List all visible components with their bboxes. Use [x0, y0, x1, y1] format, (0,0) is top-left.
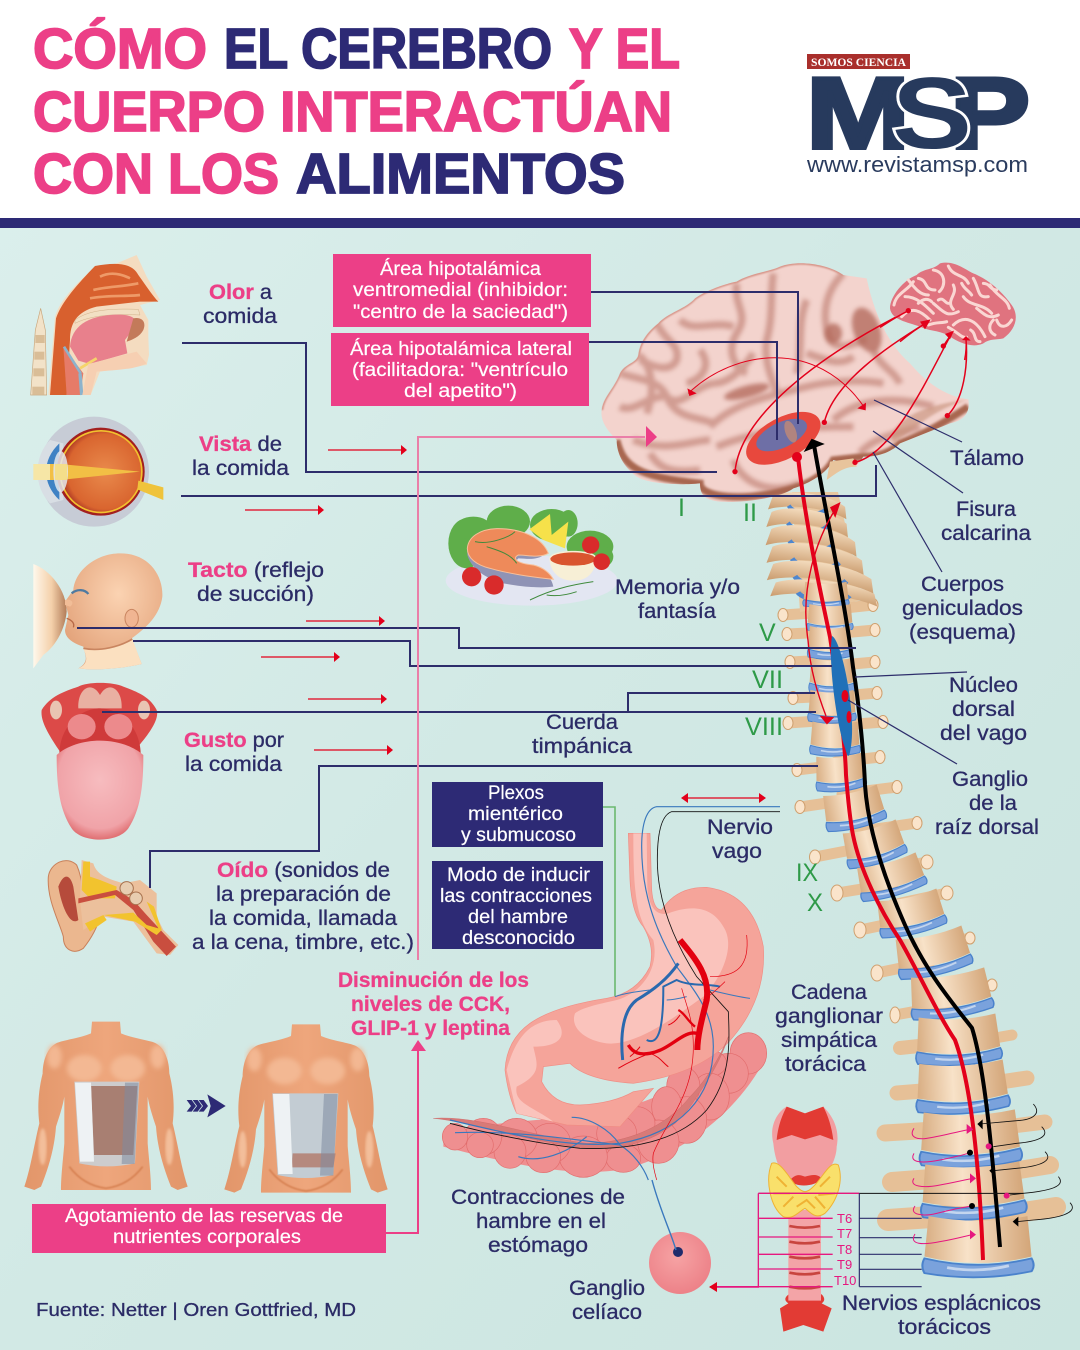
panel: ventromedial hypothalamic area [333, 254, 591, 327]
header divider bar [0, 218, 1080, 228]
icon: infant breastfeeding [33, 553, 162, 669]
text: dorsal vagal nucleus: del vago [940, 722, 1027, 745]
icon: food plate [446, 506, 618, 606]
cervical column [792, 492, 862, 612]
text: celiac ganglion [569, 1277, 645, 1324]
title: Y EL [569, 17, 680, 81]
text: splanchnic nerves: torácicos [898, 1316, 991, 1339]
text: hormone levels: GLIP-1 y leptina [351, 1017, 510, 1040]
panel: hunger contractions [432, 861, 603, 949]
text: dorsal vagal nucleus: dorsal [952, 698, 1015, 721]
panel: nutrient depletion [32, 1204, 386, 1253]
text: dorsal vagal nucleus: Núcleo [949, 674, 1018, 697]
text: splanchnic nerves [842, 1292, 1041, 1339]
title: CÓMO [33, 17, 207, 81]
text: hormone levels [338, 969, 529, 1040]
vertebral bodies and discs [803, 582, 849, 608]
panel: lateral hypothalamic area: (facilitadora: "ventrículo [352, 360, 568, 381]
illustration: thyroid and trachea [769, 1107, 840, 1332]
logo: MSP: P [950, 58, 1030, 170]
vagal nucleus [831, 636, 852, 756]
text: geniculate bodies: Cuerpos [921, 573, 1004, 596]
panel: hunger contractions: del hambre [468, 907, 568, 928]
text: memory: fantasía [638, 600, 716, 623]
text: spinal levels: T6 [837, 1211, 852, 1226]
text: hunger contractions: hambre en el [476, 1210, 606, 1233]
text: hormone levels: Disminución de los [338, 969, 529, 992]
text: spinal levels: T7 [837, 1226, 852, 1241]
text: hunger contractions: estómago [488, 1234, 588, 1257]
text: hormone levels: niveles de CCK, [351, 993, 510, 1016]
panel: ventromedial hypothalamic area: ventromedial (inhibidor: [353, 280, 568, 301]
title: EL CEREBRO [224, 17, 552, 81]
text: vagus nerve [707, 816, 773, 863]
text: vista: la comida [192, 457, 289, 480]
text: oído: Oído (sonidos de [217, 859, 390, 882]
arteries [618, 935, 747, 1180]
right transverse processes [826, 605, 1056, 1220]
icon: ear section [48, 860, 178, 956]
text: dorsal root ganglion: Ganglio [952, 768, 1028, 791]
process ends [778, 598, 997, 1023]
text: spinal levels: T9 [837, 1257, 852, 1272]
tracts [688, 311, 967, 472]
text: sympathetic chain: Cadena [791, 981, 867, 1004]
illustration: large brain [601, 263, 969, 502]
text: gusto: la comida [185, 753, 282, 776]
panel: ventromedial hypothalamic area: "centro de la saciedad") [353, 302, 568, 323]
text: vagus nerve: vago [712, 840, 762, 863]
text: oído [192, 859, 414, 954]
text: dorsal root ganglion [935, 768, 1039, 839]
small red arrows [245, 445, 766, 803]
blue nerve and veins [450, 807, 780, 1180]
icon: eye section [33, 417, 163, 527]
text: olor: Olor a [209, 281, 272, 304]
text: gusto: Gusto por [184, 729, 284, 752]
panel: lateral hypothalamic area: del apetito") [404, 381, 517, 402]
text: olor [203, 281, 277, 328]
panel: ventromedial hypothalamic area: Área hipotalámica [380, 259, 541, 280]
panel: plexus [432, 782, 603, 847]
text: calcarine fissure: calcarina [941, 522, 1031, 545]
text: hunger contractions [451, 1186, 625, 1257]
arrow: depletion chevrons [187, 1094, 226, 1117]
title: CUERPO INTERACTÚAN [33, 80, 672, 144]
text: cranial nerve numerals: IX [796, 859, 818, 887]
text: gusto [184, 729, 284, 776]
text: spinal levels: T8 [837, 1242, 852, 1257]
hypothalamus [738, 401, 829, 476]
illustration: spine [766, 488, 1056, 1277]
header band [0, 0, 1080, 218]
icon: tongue [41, 683, 157, 840]
text: dorsal root ganglion: raíz dorsal [935, 816, 1039, 839]
illustration: small brain [880, 263, 1016, 360]
panel: hunger contractions: desconocido [462, 928, 575, 949]
logo: MSP: www.revistamsp.com [806, 152, 1028, 177]
panel: hunger contractions: Modo de inducir [447, 865, 591, 886]
text: tacto: de succión) [197, 583, 314, 606]
text: calcarine fissure [941, 498, 1031, 545]
icon: celiac ganglion [649, 1180, 711, 1294]
text: cranial nerve numerals [678, 494, 823, 917]
text: celiac ganglion: Ganglio [569, 1277, 645, 1300]
text: tacto [188, 559, 324, 606]
panel: nutrient depletion: nutrientes corporales [113, 1227, 301, 1248]
left transverse processes [783, 612, 975, 1220]
title: CON LOS [33, 142, 279, 206]
text: oído: la preparación de [216, 883, 391, 906]
brainstem [827, 458, 857, 480]
text: geniculate bodies: geniculados [902, 597, 1023, 620]
spinal nerve tracts [792, 440, 1000, 1260]
text: geniculate bodies: (esquema) [909, 621, 1016, 644]
text: memory [615, 576, 740, 623]
panel: plexus: y submucoso [461, 825, 576, 846]
text: dorsal vagal nucleus [940, 674, 1027, 745]
panel: plexus: Plexos [488, 783, 544, 804]
text: chorda tympani [532, 711, 632, 758]
connector lines [77, 292, 967, 1049]
text: calcarine fissure: Fisura [956, 498, 1016, 521]
text: thalamus: Tálamo [950, 447, 1024, 470]
text: chorda tympani: timpánica [532, 735, 632, 758]
text: sympathetic chain: torácica [785, 1053, 866, 1076]
panel: hunger contractions: las contracciones [440, 886, 592, 907]
text: vista [192, 433, 289, 480]
logo: MSP [806, 54, 1030, 177]
pink pathway arrows [386, 426, 657, 1233]
text: spinal levels: T10 [834, 1273, 856, 1288]
text: source: Fuente: Netter | Oren Gottfried, MD [36, 1300, 356, 1320]
title [33, 17, 680, 206]
panel: lateral hypothalamic area: Área hipotalámica lateral [350, 339, 572, 360]
text: cranial nerve numerals: X [807, 889, 823, 917]
text: oído: la comida, llamada [209, 907, 397, 930]
black nerve [450, 812, 780, 1149]
logo: MSP: M [806, 58, 910, 170]
text: vista: Vista de [199, 433, 282, 456]
text: cranial nerve numerals: I [678, 494, 685, 522]
text: olor: comida [203, 305, 277, 328]
title: ALIMENTOS [296, 142, 625, 206]
text: spinal levels [834, 1211, 856, 1288]
text: celiac ganglion: celíaco [572, 1301, 642, 1324]
text: cranial nerve numerals: II [743, 499, 757, 527]
text: sympathetic chain: simpática [781, 1029, 877, 1052]
panel: nutrient depletion: Agotamiento de las reservas de [65, 1206, 343, 1227]
panel: lateral hypothalamic area [331, 333, 589, 406]
text: sympathetic chain: ganglionar [775, 1005, 883, 1028]
text: cranial nerve numerals: VII [752, 666, 783, 694]
illustration: stomach and pancreas [433, 807, 780, 1180]
logo: MSP: SOMOS CIENCIA [811, 57, 907, 69]
arrow: to celiac ganglion [709, 1282, 759, 1292]
text: geniculate bodies [902, 573, 1023, 644]
icon: nose and mouth section [31, 255, 160, 395]
panel: plexus: mientérico [468, 804, 563, 825]
text: hunger contractions: Contracciones de [451, 1186, 625, 1209]
text: sympathetic chain [775, 981, 883, 1076]
text: vagus nerve: Nervio [707, 816, 773, 839]
logo: MSP: S [892, 58, 972, 170]
text: dorsal root ganglion: de la [969, 792, 1017, 815]
illustration: torso with full glass [24, 1022, 188, 1190]
text: tacto: Tacto (reflejo [188, 559, 324, 582]
text: splanchnic nerves: Nervios esplácnicos [842, 1292, 1041, 1315]
text: oído: a la cena, timbre, etc.) [192, 931, 414, 954]
illustration: torso with nearly empty glass [224, 1024, 388, 1193]
text: cranial nerve numerals: V [759, 619, 776, 647]
text: chorda tympani: Cuerda [546, 711, 618, 734]
illustration: splanchnic nerve lines and labels [710, 1104, 1072, 1287]
text: cranial nerve numerals: VIII [745, 713, 783, 741]
text: memory: Memoria y/o [615, 576, 740, 599]
